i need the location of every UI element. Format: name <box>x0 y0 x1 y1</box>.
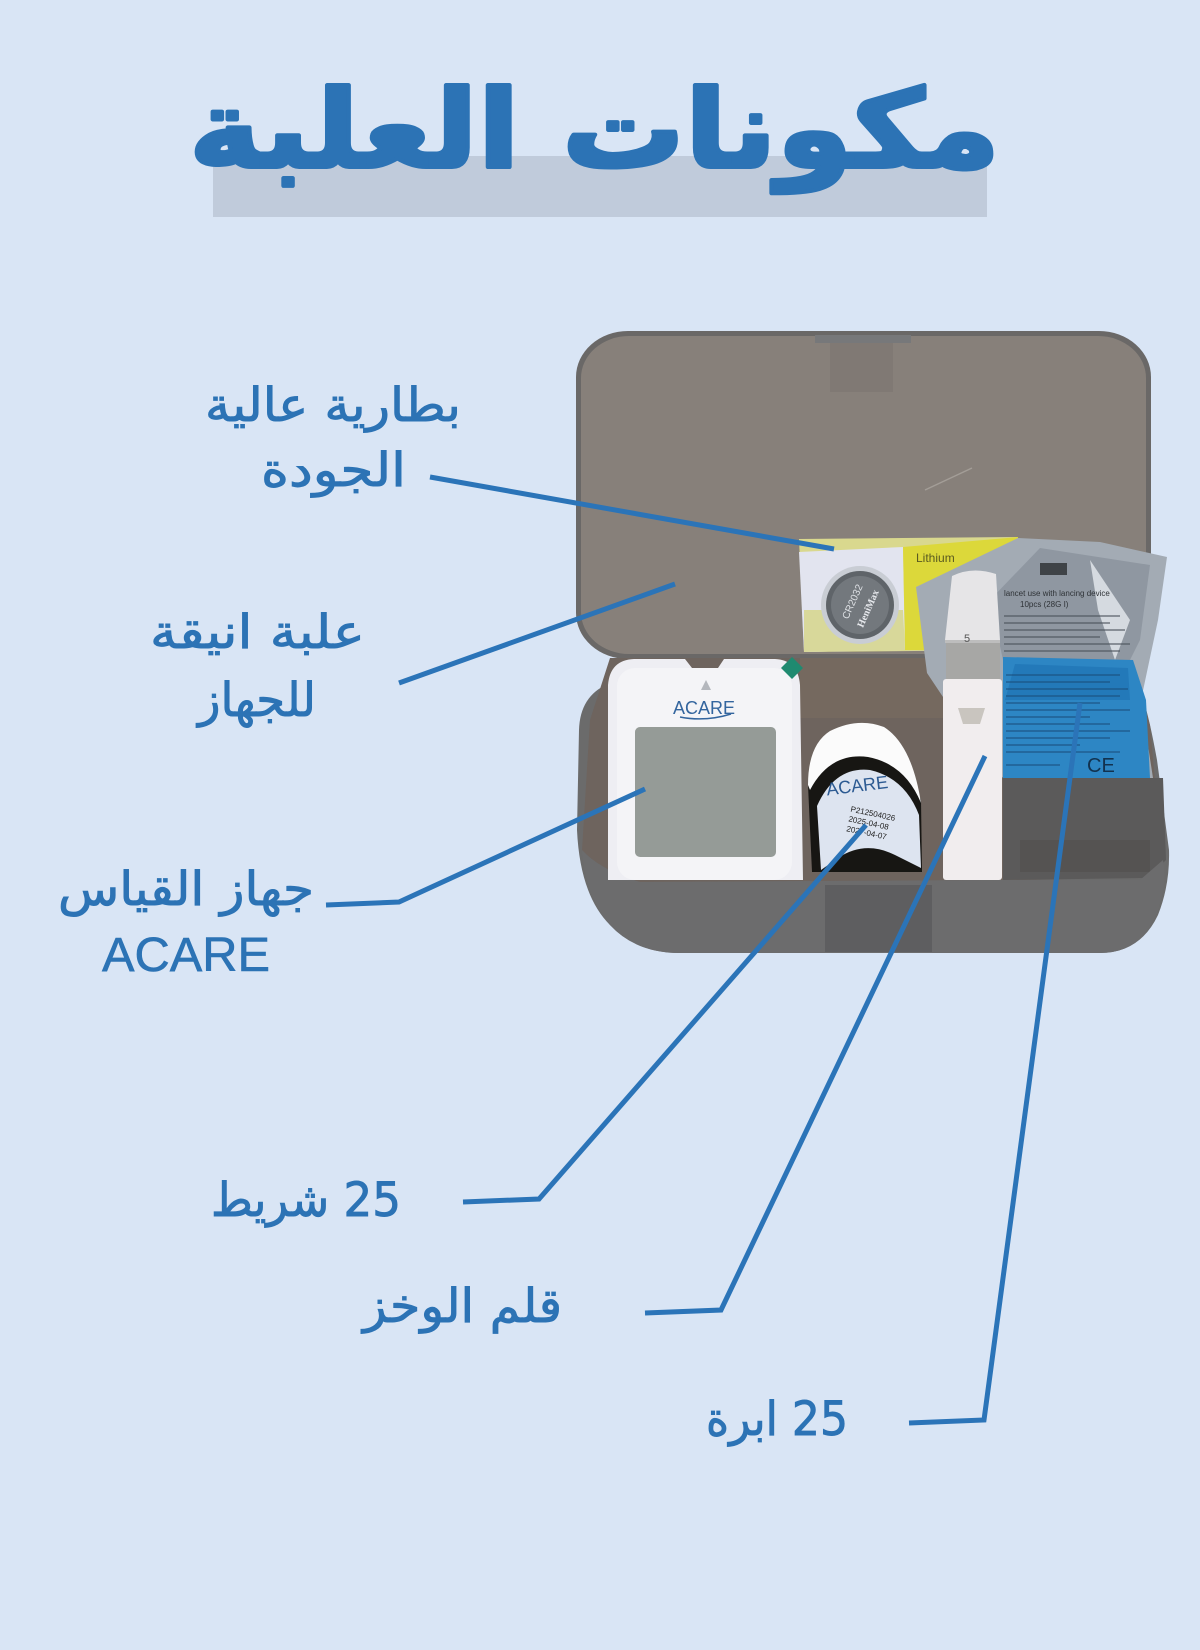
label: case: علبة انيقة <box>150 605 365 660</box>
needle bag: CE <box>1087 755 1115 777</box>
case lid <box>576 331 1151 659</box>
label: needles: 25 ابرة <box>706 1392 848 1447</box>
label: meter: جهاز القياس <box>58 862 314 917</box>
battery card <box>799 537 1018 652</box>
leader line: meter <box>326 789 645 905</box>
label: case: للجهاز <box>196 673 316 728</box>
test strip bottle: 2027-04-07 <box>846 824 888 842</box>
leader line: lancing pen <box>645 756 985 1313</box>
battery card: Lithium <box>916 551 955 565</box>
label: battery: بطارية عالية <box>205 378 461 433</box>
test strip bottle: 2025-04-08 <box>848 814 890 832</box>
battery card: CR2032 <box>841 583 866 621</box>
label: meter: ACARE <box>102 929 270 982</box>
needle bag <box>916 538 1167 778</box>
glucose meter <box>608 659 803 880</box>
test strip bottle: P212504026 <box>850 805 897 823</box>
lancing pen: 5 <box>964 633 970 645</box>
leader line: case <box>399 584 675 683</box>
leader line: needles <box>909 703 1080 1423</box>
title highlight bar <box>213 156 987 217</box>
leader line: strips <box>463 825 866 1202</box>
label: battery: الجودة <box>261 443 406 498</box>
glucose meter: ACARE <box>673 698 735 718</box>
label: battery <box>205 378 461 498</box>
case tray <box>577 658 1169 953</box>
needle bag: lancet use with lancing device <box>1004 589 1110 598</box>
label: case <box>150 605 365 728</box>
label: meter <box>58 862 314 982</box>
label: strips: 25 شريط <box>211 1173 401 1228</box>
product: open case with kit contents <box>576 331 1169 953</box>
label: lancing pen: قلم الوخز <box>361 1279 562 1334</box>
test strip bottle <box>808 723 922 872</box>
test strip bottle: ACARE <box>825 772 889 799</box>
needle bag: 10pcs (28G I) <box>1020 600 1069 609</box>
title: مكونات العلبة <box>189 68 1000 194</box>
green marker <box>781 657 803 679</box>
leader line: battery <box>430 477 834 549</box>
battery card: HeniMax <box>856 588 882 629</box>
lancing pen <box>943 570 1002 880</box>
